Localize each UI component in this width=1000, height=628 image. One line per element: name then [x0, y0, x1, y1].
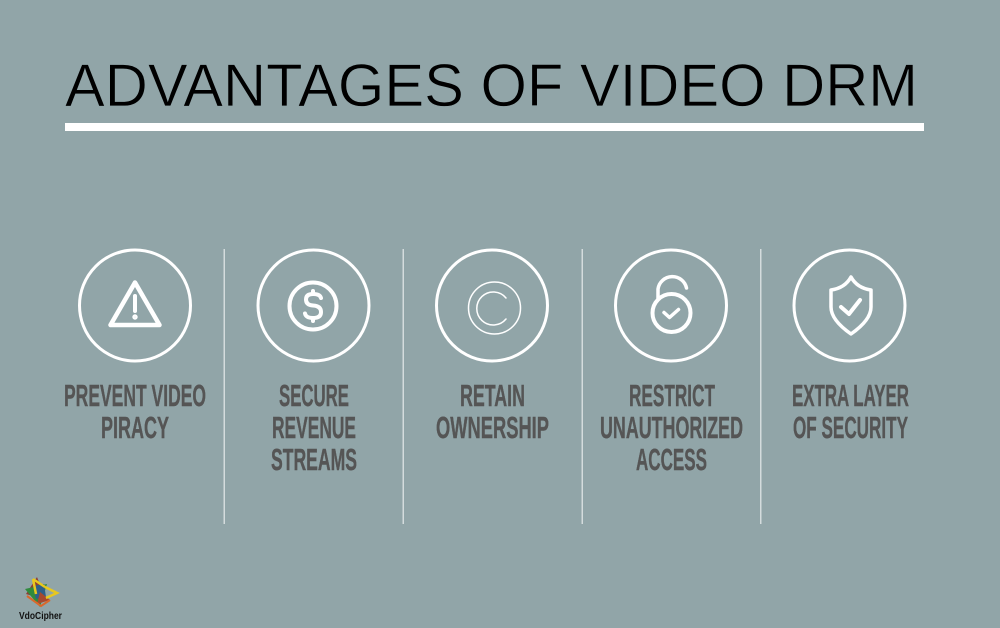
- panel: extra layer of security: [792, 250, 909, 445]
- label: OWNERSHIP: [436, 410, 549, 445]
- label: [792, 378, 909, 445]
- panel: restrict unauthorized access: [600, 250, 743, 477]
- label: RETAIN: [460, 378, 525, 413]
- icon: dollar coin: [258, 250, 369, 361]
- label: STREAMS: [271, 442, 357, 477]
- wordmark: VdoCipher: [19, 610, 62, 622]
- icon: logo star: [25, 577, 57, 607]
- icon: warning triangle: [80, 250, 190, 361]
- label: REVENUE: [272, 410, 356, 445]
- icon: open padlock with check: [616, 250, 726, 361]
- label: [600, 378, 743, 477]
- label: [64, 378, 206, 445]
- icon: shield with check: [794, 250, 905, 361]
- title: ADVANTAGES OF VIDEO DRM: [65, 52, 918, 119]
- label: RESTRICT: [629, 378, 715, 413]
- panel: retain ownership: [436, 250, 549, 445]
- title underline: [65, 123, 924, 131]
- icon: copyright: [436, 250, 548, 361]
- label: OF SECURITY: [793, 410, 908, 445]
- label: [436, 378, 549, 445]
- logo: VdoCipher: [19, 577, 62, 622]
- label: [271, 378, 357, 477]
- label: SECURE: [279, 378, 349, 413]
- panel: secure revenue streams: [258, 250, 369, 477]
- panel: prevent video piracy: [64, 250, 206, 445]
- label: PREVENT VIDEO: [64, 378, 206, 413]
- label: UNAUTHORIZED: [600, 410, 743, 445]
- label: PIRACY: [101, 410, 169, 445]
- label: ACCESS: [636, 442, 707, 477]
